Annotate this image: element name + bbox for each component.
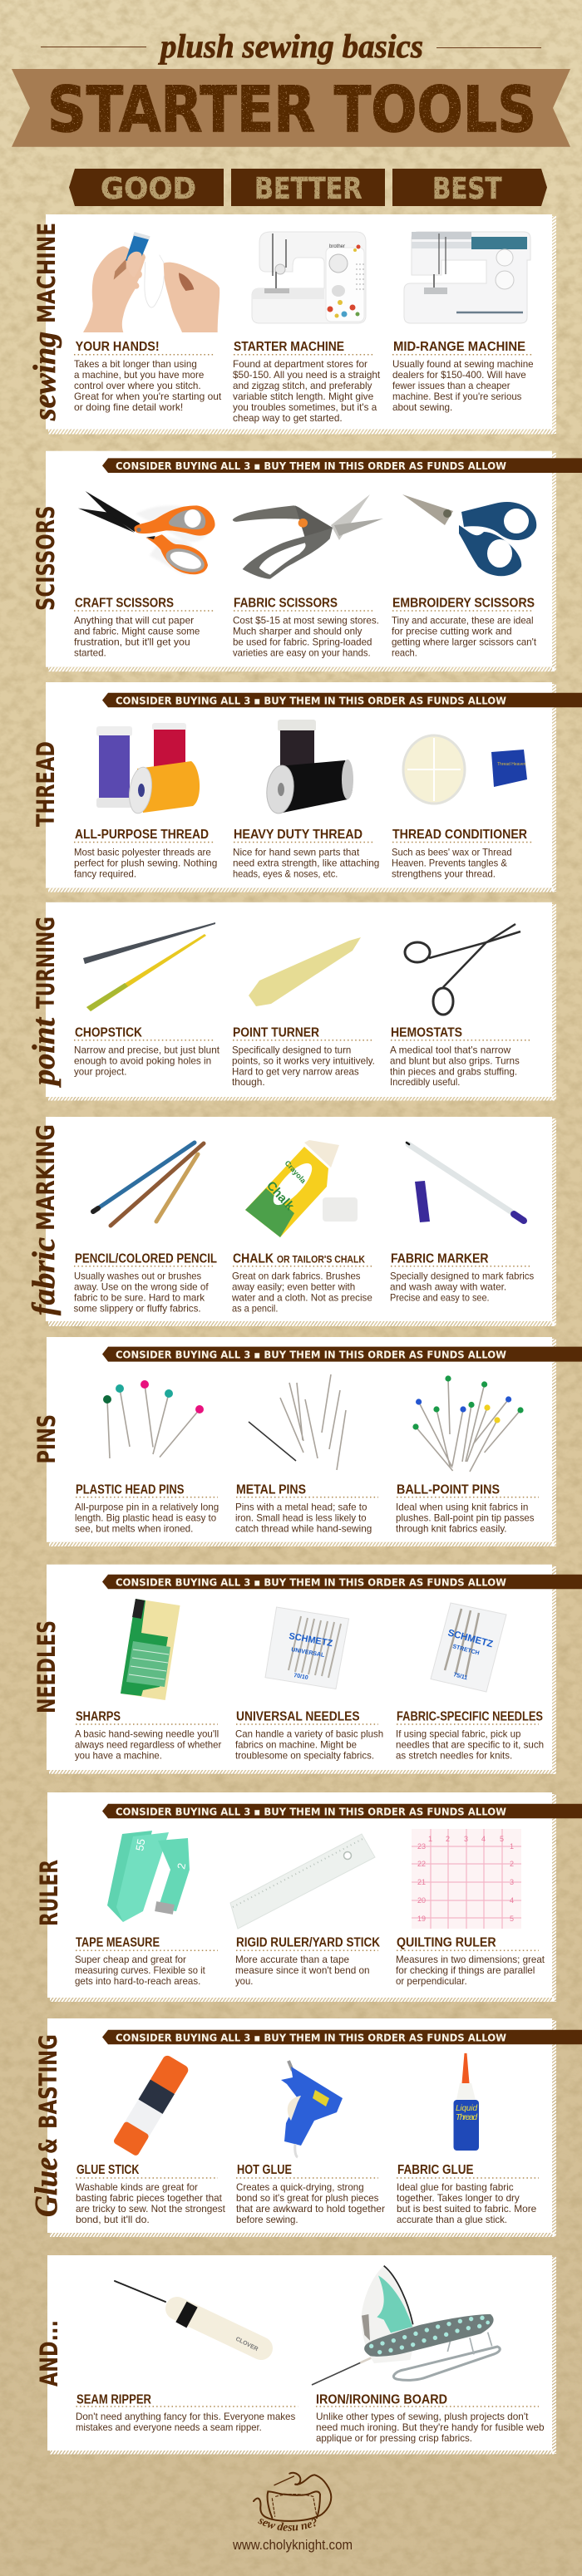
item: starter machine: and zigzag stitch, and preferably <box>233 380 372 391</box>
icon: quilting ruler: 5 <box>510 1915 514 1923</box>
item: glue stick <box>76 2163 226 2225</box>
banner: CONSIDER BUYING ALL 3 ▪ BUY THEM IN THIS ORDER AS FUNDS ALLOW <box>116 695 506 706</box>
panel: needles <box>32 1565 582 1774</box>
item: hot glue: HOT GLUE <box>237 2163 292 2177</box>
item: fabric-specific needles: FABRIC-SPECIFIC NEEDLES <box>397 1710 543 1724</box>
item: tape measure <box>75 1935 218 1987</box>
icon: universal needles: UNIVERSAL <box>291 1647 325 1659</box>
icon: fabric glue bottle <box>454 2053 479 2151</box>
section label: TURNING <box>32 917 60 1009</box>
panel: and... <box>35 2255 556 2455</box>
item: rigid ruler: More accurate than a tape <box>235 1954 349 1965</box>
icon: fabric marker <box>407 1143 524 1222</box>
icon: glue stick <box>112 2054 190 2156</box>
item: fabric marker: Precise and easy to see. <box>390 1291 490 1303</box>
item: starter machine: Found at department stores for <box>233 358 367 370</box>
section label: NEEDLES <box>32 1620 61 1713</box>
item: seam ripper: SEAM RIPPER <box>76 2392 151 2406</box>
item: tape measure: measuring curves. Flexible so it <box>75 1964 205 1976</box>
item: all-purpose thread: ALL-PURPOSE THREAD <box>75 828 209 842</box>
tier header: better: BETTER <box>254 172 363 206</box>
item: pencil: PENCIL/COLORED PENCIL <box>75 1252 217 1266</box>
icon: quilting ruler: 2 <box>510 1860 514 1868</box>
item: chopstick: CHOPSTICK <box>75 1025 142 1040</box>
icon: dark metal pin <box>249 1422 296 1461</box>
icon: tape measure <box>107 1831 190 1922</box>
panel: point turning <box>27 902 556 1100</box>
item: heavy duty thread: need extra strength, like attaching <box>233 857 379 868</box>
item: quilting ruler: QUILTING RULER <box>397 1935 496 1949</box>
section label: SCISSORS <box>32 506 60 611</box>
item: starter machine <box>233 340 381 424</box>
item: chalk: Great on dark fabrics. Brushes <box>232 1270 361 1281</box>
item: fabric glue: but is best suited to fabric. More <box>397 2203 537 2215</box>
section label <box>27 1124 62 1315</box>
item: glue stick: GLUE STICK <box>76 2163 140 2177</box>
section label: MACHINE <box>32 223 61 323</box>
item: your hands <box>74 340 222 413</box>
item: point turner: Specifically designed to turn <box>232 1044 351 1055</box>
item: universal needles <box>235 1710 383 1762</box>
icon: hemostats <box>405 924 520 1015</box>
item: pencil <box>73 1252 217 1314</box>
item: all-purpose thread: Most basic polyester threads are <box>74 846 211 858</box>
item: embroidery scissors: EMBROIDERY SCISSORS <box>392 596 535 610</box>
item: chalk: water and a cloth. Not as precise <box>231 1291 372 1303</box>
item: tape measure: TAPE MEASURE <box>76 1935 160 1949</box>
panel: pins <box>32 1337 582 1546</box>
item: hemostats: thin pieces and grabs stuffing. <box>390 1065 517 1077</box>
item: starter machine: cheap way to get started. <box>233 412 343 424</box>
item: heavy duty thread <box>233 828 379 879</box>
item: embroidery scissors: getting where larger scissors can't <box>392 637 537 648</box>
icon: quilting ruler: 2 <box>446 1835 450 1843</box>
icon: chalk box: Crayola <box>284 1159 308 1186</box>
item: starter machine: variable stitch length. Might give <box>233 391 374 402</box>
icon: quilting ruler: 1 <box>510 1842 514 1851</box>
logo: sew desu ne cat: sew desu ne? <box>258 2518 316 2531</box>
item: plastic head pins <box>75 1483 219 1534</box>
icon: quilting ruler: 23 <box>417 1842 426 1851</box>
icon: thread conditioner <box>403 735 527 804</box>
item: your hands: a machine, but you have more <box>74 369 205 381</box>
section label: point <box>27 1017 62 1088</box>
icon: tape measure: 55 <box>133 1838 147 1852</box>
icon: universal needles <box>265 1607 349 1689</box>
item: hot glue: before sewing. <box>236 2214 298 2225</box>
item: all-purpose thread: perfect for plush sewing. Nothing <box>74 857 217 868</box>
icon: quilting ruler: 4 <box>510 1896 514 1905</box>
item: heavy duty thread: heads, eyes & noses, etc. <box>233 868 338 879</box>
icon: quilting ruler: 21 <box>417 1878 426 1886</box>
item: mid-range machine <box>392 340 534 413</box>
icon: stretch needles: STRETCH <box>451 1644 480 1656</box>
item: iron: applique or for pressing crisp fabrics. <box>316 2432 472 2444</box>
icon: quilting ruler: 22 <box>417 1860 426 1868</box>
item: embroidery scissors: for precise cutting work and <box>392 625 512 637</box>
section label: RULER <box>35 1860 63 1926</box>
item: embroidery scissors: reach. <box>392 647 417 659</box>
item: starter machine: $50-150. All you need is a straight <box>233 369 381 381</box>
item: plastic head pins: PLASTIC HEAD PINS <box>76 1483 185 1497</box>
icon: embroidery scissors <box>402 494 536 576</box>
item: ball-point pins <box>396 1483 539 1534</box>
icon: stretch needles: SCHMETZ <box>446 1628 494 1649</box>
banner: CONSIDER BUYING ALL 3 ▪ BUY THEM IN THIS ORDER AS FUNDS ALLOW <box>116 460 506 472</box>
icon: quilting ruler <box>412 1829 521 1929</box>
section label: sewing <box>27 332 62 421</box>
banner: CONSIDER BUYING ALL 3 ▪ BUY THEM IN THIS ORDER AS FUNDS ALLOW <box>116 1348 506 1360</box>
subtitle: plush sewing basics: plush sewing basics <box>158 27 423 65</box>
item: craft scissors: CRAFT SCISSORS <box>75 596 174 610</box>
item: fabric-specific needles: as stretch needles for knits. <box>396 1750 512 1762</box>
item: fabric scissors: varieties are easy on your hands. <box>233 647 371 659</box>
icon: quilting ruler: 3 <box>510 1878 514 1886</box>
item: quilting ruler <box>396 1935 545 1987</box>
item: chopstick: Narrow and precise, but just blunt <box>74 1044 220 1055</box>
item: pencil: Usually washes out or brushes <box>74 1270 201 1281</box>
item: chalk: CHALK OR TAILOR'S CHALK <box>233 1252 365 1266</box>
item: hemostats: and blunt but also grips. Turns <box>390 1054 520 1066</box>
icon: seam ripper: CLOVER <box>234 2337 259 2352</box>
item: your hands: Great for when you're starting out <box>74 391 222 402</box>
item: metal pins <box>235 1483 378 1534</box>
section label: AND... <box>35 2320 63 2387</box>
item: thread conditioner: Heaven. Prevents tangles & <box>392 857 507 868</box>
item: your hands: Takes a bit longer than using <box>74 358 197 370</box>
item: universal needles: UNIVERSAL NEEDLES <box>236 1710 360 1724</box>
item: glue stick: are tricky to sew. Not the strongest <box>76 2203 226 2215</box>
icon: tape measure: 2 <box>175 1862 188 1871</box>
tier header: good: GOOD <box>101 172 196 206</box>
icon: chalk box <box>245 1140 358 1237</box>
item: quilting ruler: for checking if things are parallel <box>396 1964 535 1976</box>
item: seam ripper: Don't need anything fancy for this. Everyone makes <box>76 2411 295 2422</box>
item: hot glue: Creates a quick-drying, strong <box>236 2181 364 2193</box>
item: chopstick <box>74 1025 220 1077</box>
icon: quilting ruler: 3 <box>464 1835 468 1843</box>
icon: iron and ironing board <box>312 2266 500 2385</box>
icon: pencils <box>93 1143 204 1226</box>
item: hemostats: Incredibly useful. <box>390 1076 460 1088</box>
item: hemostats <box>390 1025 530 1088</box>
item: fabric-specific needles <box>396 1710 544 1762</box>
item: starter machine: you troubles sometimes, but it's a <box>233 401 377 413</box>
banner: CONSIDER BUYING ALL 3 ▪ BUY THEM IN THIS ORDER AS FUNDS ALLOW <box>116 2031 506 2044</box>
icon: rigid ruler <box>230 1834 375 1929</box>
item: fabric scissors: be used for fabric. Spring-loaded <box>233 637 372 648</box>
section label: BASTING <box>34 2034 62 2129</box>
item: embroidery scissors: Tiny and accurate, these are ideal <box>392 614 534 626</box>
item: rigid ruler <box>235 1935 380 1987</box>
item: seam ripper <box>76 2392 298 2433</box>
icon: quilting ruler: 4 <box>481 1835 486 1843</box>
section label <box>27 223 62 421</box>
item: chopstick: enough to avoid poking holes in <box>74 1054 211 1066</box>
item: thread conditioner <box>392 828 534 879</box>
section label: Glue <box>29 2157 64 2217</box>
icon: fabric scissors <box>233 494 383 579</box>
item: iron: Unlike other types of sewing, plush projects don't <box>316 2411 529 2422</box>
item: fabric marker: Specially designed to mark fabrics <box>390 1270 534 1281</box>
icon: stretch needles <box>431 1603 506 1692</box>
item: hot glue: bond so it's great for plush pieces <box>236 2192 378 2204</box>
icon: point turner <box>249 937 361 1006</box>
item: seam ripper: mistakes and everyone needs a seam ripper. <box>76 2421 262 2433</box>
item: plastic head pins: length. Big plastic head is easy to <box>75 1512 216 1523</box>
item: fabric scissors: FABRIC SCISSORS <box>234 596 338 610</box>
item: chalk: away easily; even better with <box>232 1281 355 1292</box>
item: fabric-specific needles: If using special fabric, pick up <box>396 1728 521 1739</box>
item: sharps <box>75 1710 221 1762</box>
item: your hands: or doing fine detail work! <box>74 401 183 413</box>
icon: quilting ruler: 19 <box>417 1915 426 1923</box>
panel: ruler <box>35 1792 582 2002</box>
item: point turner: Hard to get very narrow areas <box>232 1065 359 1077</box>
item: fabric marker <box>390 1252 534 1303</box>
website url: www.cholyknight.com <box>232 2537 353 2553</box>
item: iron: IRON/IRONING BOARD <box>316 2392 447 2406</box>
item: point turner <box>232 1025 375 1088</box>
item: ball-point pins: BALL-POINT PINS <box>397 1483 500 1497</box>
icon: all-purpose thread <box>96 723 200 815</box>
icon: starter sewing machine <box>252 232 366 323</box>
item: tape measure: Super cheap and great for <box>75 1954 186 1965</box>
item: rigid ruler: you. <box>235 1975 253 1987</box>
icon: thread conditioner: Thread Heaven <box>497 762 526 767</box>
item: fabric glue: Ideal glue for basting fabric <box>397 2181 514 2193</box>
icon: heavy duty thread <box>264 720 353 815</box>
item: mid-range machine: about sewing. <box>392 401 452 413</box>
item: craft scissors: and fabric. Might cause some <box>74 625 200 637</box>
item: heavy duty thread: HEAVY DUTY THREAD <box>234 828 363 842</box>
icon: metal pins <box>280 1374 346 1470</box>
tier header: good <box>69 169 224 206</box>
icon: quilting ruler: 20 <box>417 1896 426 1905</box>
section label: PINS <box>32 1414 61 1464</box>
item: fabric glue: together. Takes longer to dry <box>397 2192 520 2204</box>
icon: hot glue gun <box>281 2061 343 2157</box>
item: pencil: away. Use on the wrong side of <box>74 1281 209 1292</box>
item: mid-range machine: Usually found at sewing machine <box>392 358 534 370</box>
item: sharps: always need regardless of whether <box>75 1738 221 1750</box>
item: point turner: POINT TURNER <box>233 1025 319 1040</box>
item: starter machine: STARTER MACHINE <box>234 340 344 354</box>
item: mid-range machine: MID-RANGE MACHINE <box>393 340 525 354</box>
item: fabric scissors <box>233 596 379 659</box>
item: sharps: SHARPS <box>76 1710 121 1724</box>
panel: thread <box>32 682 582 892</box>
item: fabric scissors: Much sharper and should only <box>233 625 362 637</box>
item: quilting ruler: Measures in two dimensions; great <box>396 1954 545 1965</box>
item: chopstick: your project. <box>74 1065 126 1077</box>
item: fabric marker: and wash away with water. <box>390 1281 506 1292</box>
icon: craft scissors <box>78 491 215 577</box>
icon: universal needles: SCHMETZ <box>288 1631 333 1649</box>
item: mid-range machine: fewer issues than a cheaper <box>392 380 510 391</box>
section label: MARKING <box>32 1124 60 1231</box>
item: heavy duty thread: Nice for hand sewn parts that <box>233 846 360 858</box>
item: rigid ruler: measure since it won't bend on <box>235 1964 370 1976</box>
banner: CONSIDER BUYING ALL 3 ▪ BUY THEM IN THIS ORDER AS FUNDS ALLOW <box>116 1576 506 1589</box>
item: ball-point pins: Ideal when using knit fabrics in <box>396 1501 528 1512</box>
icon: chalk box: Chalk <box>264 1178 297 1214</box>
section label: fabric <box>27 1237 62 1315</box>
item: glue stick: bond, but it'll do. <box>76 2214 150 2225</box>
item: fabric marker: FABRIC MARKER <box>391 1252 489 1266</box>
item: embroidery scissors <box>392 596 537 659</box>
item: universal needles: troublesome on specialty fabrics. <box>235 1750 374 1762</box>
item: metal pins: Pins with a metal head; safe to <box>235 1501 367 1512</box>
item: universal needles: Can handle a variety of basic plush <box>235 1728 383 1739</box>
icon: hands with thread <box>83 232 219 332</box>
panel: fabric marking <box>27 1117 556 1326</box>
panel: sewing machine <box>27 214 556 434</box>
item: all-purpose thread <box>74 828 217 879</box>
tier header: best <box>392 169 547 206</box>
item: your hands: control over where you stitch. <box>74 380 201 391</box>
item: hemostats: HEMOSTATS <box>391 1025 462 1040</box>
item: metal pins: catch thread while hand-sewing <box>235 1522 372 1534</box>
item: thread conditioner: THREAD CONDITIONER <box>392 828 527 842</box>
item: craft scissors <box>74 596 215 659</box>
panel: scissors <box>32 451 582 671</box>
icon: mid-range sewing machine <box>404 232 530 323</box>
icon: quilting ruler: 1 <box>428 1835 432 1843</box>
section label <box>29 2034 64 2217</box>
item: hot glue: that are awkward to hold together <box>236 2203 385 2215</box>
item: fabric glue: accurate than a glue stick. <box>397 2214 507 2225</box>
icon: plastic head pins <box>103 1380 204 1458</box>
item: thread conditioner: strengthens your thread. <box>392 868 496 879</box>
item: sharps: you have a machine. <box>75 1750 162 1762</box>
item: craft scissors: frustration, but it'll get you <box>74 637 190 648</box>
section label: THREAD <box>32 741 60 827</box>
item: chalk: as a pencil. <box>232 1302 278 1314</box>
icon: stretch needles: 75/11 <box>452 1672 468 1681</box>
item: mid-range machine: machine. Best if you're serious <box>392 391 521 402</box>
item: metal pins: METAL PINS <box>236 1483 306 1497</box>
item: mid-range machine: dealers for $150-400. Will have <box>392 369 526 381</box>
item: hemostats: A medical tool that's narrow <box>390 1044 510 1055</box>
item: your hands: YOUR HANDS! <box>76 340 160 354</box>
icon: fabric glue bottle: Liquid <box>456 2104 477 2113</box>
item: pencil: fabric to be sure. Hard to mark <box>74 1291 205 1303</box>
item: plastic head pins: All-purpose pin in a relatively long <box>75 1501 219 1512</box>
item: craft scissors: Anything that will cut paper <box>74 614 194 626</box>
item: fabric glue: FABRIC GLUE <box>397 2163 474 2177</box>
icon: ball-point pins <box>412 1375 524 1472</box>
item: glue stick: basting fabric pieces together that <box>76 2192 223 2204</box>
item: fabric glue <box>397 2163 539 2225</box>
item: sharps: A basic hand-sewing needle you'll <box>75 1728 219 1739</box>
banner: CONSIDER BUYING ALL 3 ▪ BUY THEM IN THIS ORDER AS FUNDS ALLOW <box>116 1805 506 1818</box>
item: plastic head pins: see, but melts when ironed. <box>75 1522 193 1534</box>
item: ball-point pins: plushes. Ball-point pin tip passes <box>396 1512 534 1523</box>
item: thread conditioner: Such as bees' wax or Thread <box>392 846 512 858</box>
item: point turner: though. <box>232 1076 265 1088</box>
icon: starter sewing machine: brother <box>329 244 345 249</box>
logo: sew desu ne cat <box>253 2471 333 2531</box>
item: all-purpose thread: fancy required. <box>74 868 136 879</box>
item: ball-point pins: through knit fabrics easily. <box>396 1522 507 1534</box>
item: point turner: points, so it works very intuitively. <box>232 1054 375 1066</box>
item: tape measure: gets into hard-to-reach areas. <box>75 1975 200 1987</box>
item: rigid ruler: RIGID RULER/YARD STICK <box>236 1935 380 1949</box>
icon: fabric glue bottle: Thread <box>456 2113 477 2122</box>
item: fabric scissors: Cost $5-15 at most sewing stores. <box>233 614 379 626</box>
item: universal needles: fabrics on machine. Might be <box>235 1738 357 1750</box>
item: iron <box>316 2392 545 2444</box>
panel: glue and basting <box>29 2018 582 2237</box>
item: craft scissors: started. <box>74 647 106 659</box>
item: quilting ruler: or perpendicular. <box>396 1975 467 1987</box>
icon: universal needles: 70/10 <box>293 1673 308 1681</box>
icon: chopsticks <box>83 922 215 1011</box>
item: hot glue <box>236 2163 385 2225</box>
icon: quilting ruler: 5 <box>500 1835 504 1843</box>
item: pencil: some slippery or fluffy fabrics. <box>73 1302 201 1314</box>
item: glue stick: Washable kinds are great for <box>76 2181 198 2193</box>
section label: & <box>34 2138 62 2154</box>
icon: seam ripper <box>115 2281 261 2352</box>
section label <box>27 917 62 1088</box>
item: iron: need much ironing. But they're handy for fusible web <box>316 2421 545 2433</box>
tier header: best: BEST <box>432 172 502 206</box>
icon: sharps card <box>121 1599 180 1700</box>
item: fabric-specific needles: needles that are specific to it, such <box>396 1738 544 1750</box>
item: chalk <box>231 1252 372 1314</box>
item: metal pins: iron. Small head is less likely to <box>235 1512 367 1523</box>
